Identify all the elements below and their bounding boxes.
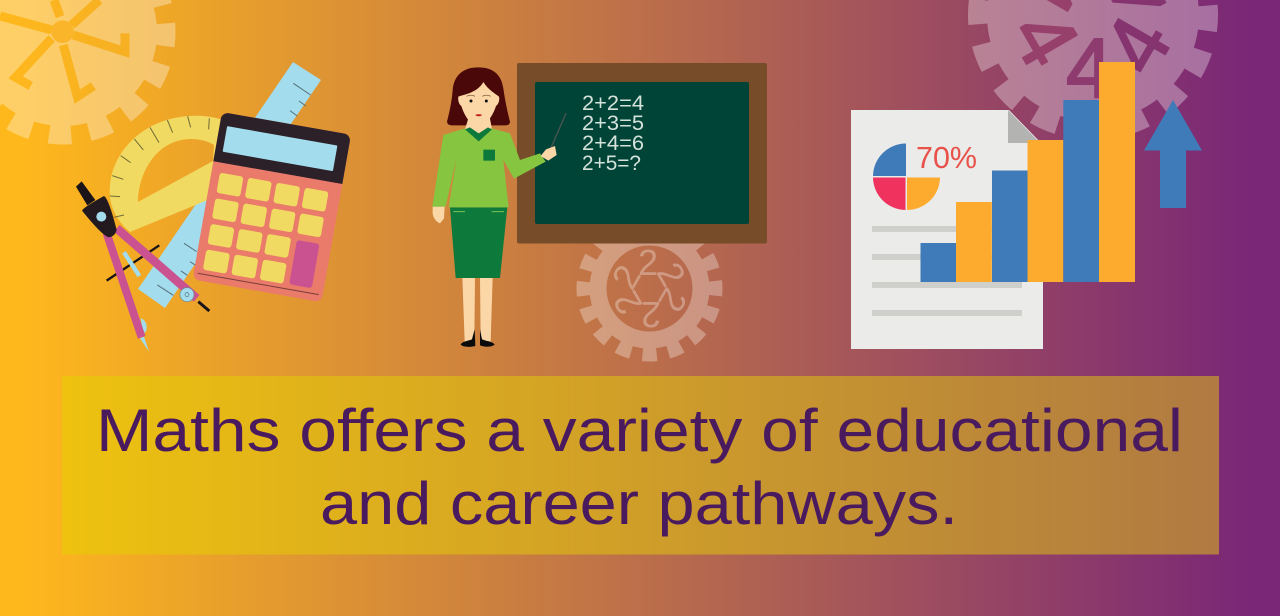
pocket (483, 150, 495, 161)
eyes and brows (469, 99, 472, 102)
gear: centre with twos: 2 (650, 281, 696, 319)
heading: Maths offers a variety of educational (96, 397, 1183, 464)
icon: ruler (138, 62, 321, 308)
gear: top left with sevens (0, 0, 166, 134)
hand on pointer (541, 146, 557, 161)
pie chart (873, 143, 940, 210)
panel: headline band (62, 376, 1219, 554)
gear: centre with twos: 2 (641, 294, 661, 335)
hair (447, 67, 510, 125)
icon: calculator (192, 112, 351, 302)
gear: centre with twos: 2 (649, 255, 694, 293)
document text lines (872, 226, 1022, 316)
gear: centre with twos: 2 (603, 258, 649, 296)
icon: protractor (110, 116, 232, 232)
bar chart (920, 62, 1135, 282)
gear: centre with twos: 2 (605, 284, 650, 322)
text: sums on the board: 2+5=? (582, 151, 641, 175)
icon: compass (76, 181, 209, 352)
shoes (461, 329, 495, 347)
heading: and career pathways. (320, 470, 958, 537)
gear: top right with fours (978, 0, 1208, 130)
heading (96, 397, 1183, 537)
hand (433, 207, 445, 223)
collar (465, 127, 492, 141)
gear: top right with fours: 4 (1066, 21, 1113, 115)
panel: report document (851, 110, 1043, 349)
gear: top right with fours: 4 (1085, 1, 1189, 88)
top (432, 128, 546, 207)
legs (462, 277, 493, 342)
illustration: teacher (432, 67, 566, 347)
panel: blackboard (517, 63, 767, 244)
face (458, 82, 499, 127)
arrow: upward (1144, 100, 1202, 208)
text: 70%: 70% (916, 140, 977, 175)
neck (465, 115, 492, 133)
skirt (450, 207, 507, 278)
pointer (548, 113, 566, 154)
gear: centre with twos: 2 (638, 242, 658, 283)
icon: maths tools (76, 62, 351, 352)
gear: centre with twos (584, 222, 716, 354)
text: sums on the board: 2+3=5 (582, 111, 644, 135)
text: sums on the board (582, 91, 644, 175)
text: sums on the board: 2+4=6 (582, 131, 644, 155)
text: sums on the board: 2+2=4 (582, 91, 644, 115)
